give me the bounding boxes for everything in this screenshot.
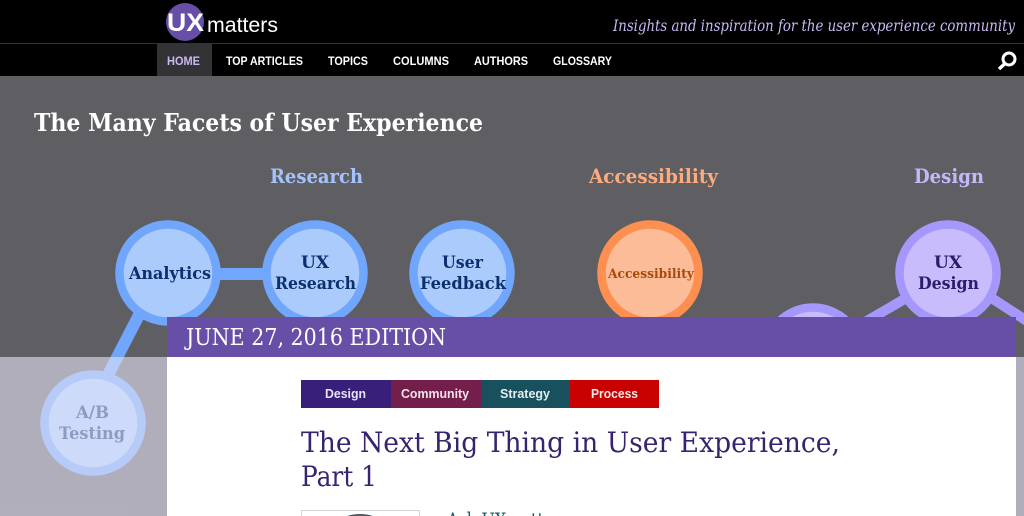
nav item: TOPICS: TOPICS [328,54,368,68]
node: UX Design: Design [918,274,979,294]
tag: Design: Design [325,386,366,401]
article headline: The Next Big Thing in User Experience, [301,426,840,459]
node: A/B Testing: Testing [59,424,125,444]
node: partially hidden design facet [764,308,862,404]
connector: Analytics to A/B Testing [108,313,140,375]
nav item: TOP ARTICLES: TOP ARTICLES [226,54,303,68]
connector: UX Design to right [990,297,1024,323]
connector: Analytics to UX Research [215,268,270,280]
node: Accessibility [602,224,698,322]
edition banner [167,317,1016,357]
logo: UX [167,9,204,37]
node: UX Research: Research [275,274,356,294]
node: User Feedback [414,224,510,322]
node: UX Research: UX [301,253,330,273]
node: UX Research [266,224,364,322]
active nav item: HOME [157,44,212,76]
navigation bar [0,43,1024,76]
main content panel [167,357,1016,516]
logo: matters [207,14,278,37]
logo [166,3,278,41]
top header bar [0,0,1024,43]
node: A/B Testing [44,374,142,472]
article headline [301,426,840,493]
category tags [301,380,659,408]
node: User Feedback: Feedback [420,274,507,294]
tag: Community [391,380,481,408]
node: Analytics: Analytics [128,264,211,284]
node: Accessibility: Accessibility [607,267,694,282]
tag: Strategy: Strategy [500,386,551,401]
author photo frame [302,510,420,516]
hero title: The Many Facets of User Experience [34,108,483,137]
nav item: GLOSSARY: GLOSSARY [553,54,612,68]
active nav item: HOME: HOME [167,54,200,68]
tag: Process [570,380,659,408]
edition banner: JUNE 27, 2016 EDITION [184,325,446,351]
node: UX Design: UX [934,253,963,273]
nav item: AUTHORS: AUTHORS [474,54,528,68]
article headline: Part 1 [301,460,377,493]
nav item: COLUMNS: COLUMNS [393,54,449,68]
heading: Accessibility: Accessibility [588,164,719,188]
node: UX Design [900,224,996,322]
tag: Community: Community [401,386,470,401]
icon: search [999,53,1015,69]
tag: Strategy [481,380,570,408]
tag: Design [301,380,391,408]
heading: Design: Design [914,164,984,188]
node: User Feedback: User [442,253,484,273]
heading: Research: Research [270,164,363,188]
tag: Process: Process [591,386,638,401]
node: Analytics [120,224,216,322]
connector: UX Design to small node [860,297,908,325]
page fade overlay [0,357,1024,516]
node: A/B Testing: A/B [75,403,109,423]
